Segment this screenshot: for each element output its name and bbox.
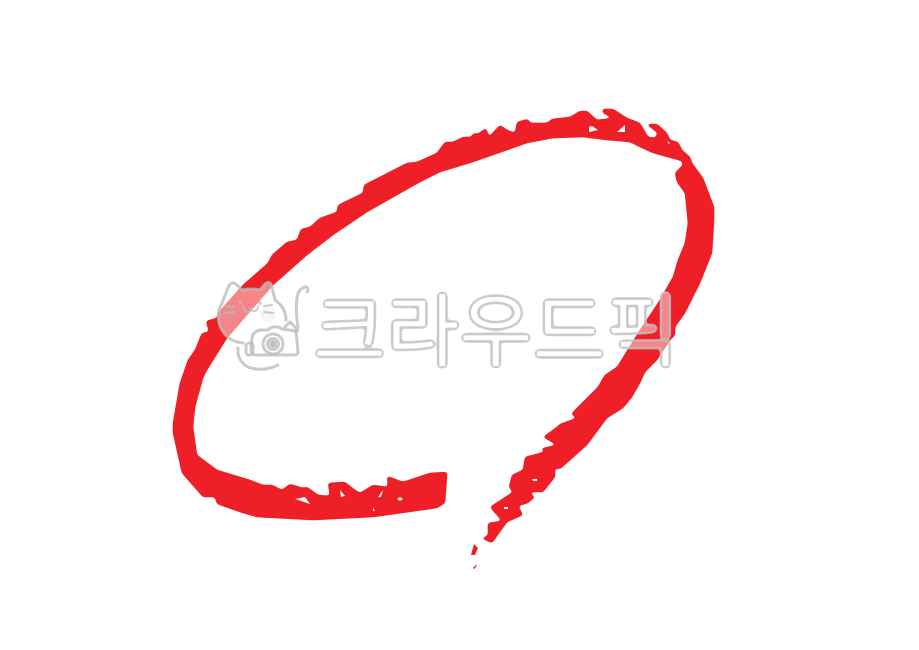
cat cheeks (223, 306, 276, 322)
cat tail (296, 287, 308, 327)
camera grip (246, 343, 253, 355)
cat face (225, 301, 273, 313)
camera lens (263, 334, 283, 354)
red brush stroke circle (173, 109, 714, 569)
cat head (218, 283, 286, 345)
watermark: crowdpic wordmark: 크라우드픽 (313, 288, 679, 377)
camera body (251, 327, 298, 355)
watermark: cat with camera icon (218, 283, 308, 369)
cat arm (238, 348, 278, 369)
